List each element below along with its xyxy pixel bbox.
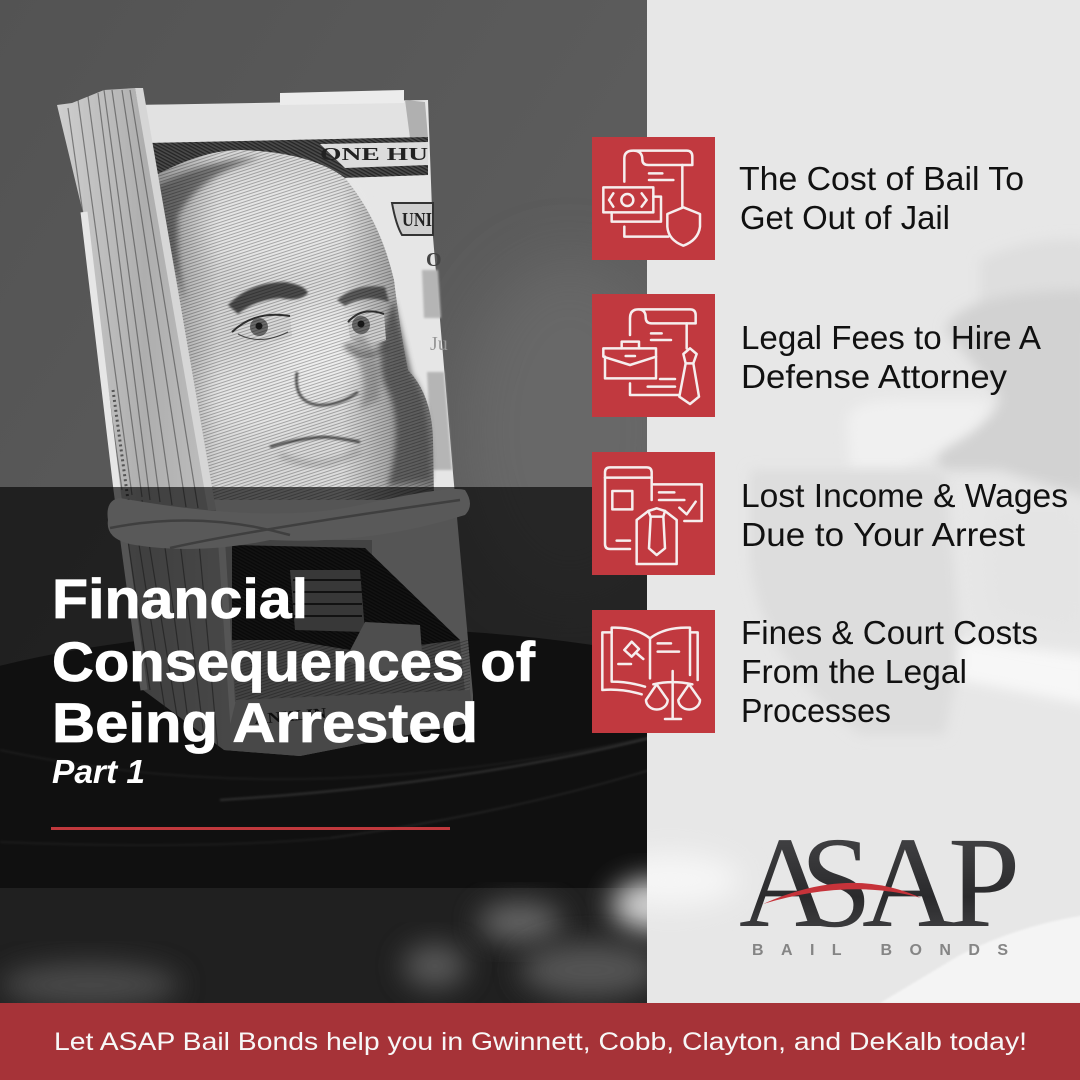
title: Consequences of bbox=[52, 630, 535, 693]
list item: fines bbox=[592, 610, 1038, 733]
logo: ASAP Bail Bonds: P bbox=[948, 811, 1020, 955]
red divider bbox=[51, 827, 450, 830]
left eye bbox=[232, 313, 292, 342]
united states plate: O bbox=[426, 249, 442, 271]
list item: cost of bail bbox=[592, 137, 1024, 260]
panel: photo background with money roll bbox=[0, 0, 647, 1003]
icon: bail money and shield document bbox=[592, 137, 715, 260]
portrait face bbox=[147, 150, 434, 500]
text: lost income bbox=[741, 477, 1068, 553]
logo: ASAP Bail Bonds: A bbox=[862, 811, 956, 955]
dark title overlay bbox=[0, 487, 647, 888]
subtitle: Part 1 bbox=[52, 753, 145, 790]
logo: ASAP Bail Bonds: S bbox=[800, 811, 872, 955]
money roll bbox=[57, 88, 473, 756]
right eye bbox=[345, 311, 388, 355]
text: cost of bail bbox=[739, 160, 1024, 236]
rubber band bbox=[108, 489, 470, 549]
engraving lines over face bbox=[147, 150, 434, 500]
united states plate bbox=[392, 203, 442, 271]
text: legal fees: Defense Attorney bbox=[741, 358, 1008, 395]
text: cost of bail: The Cost of Bail To bbox=[739, 160, 1024, 197]
icon: law book and scales bbox=[592, 610, 715, 733]
left brow bbox=[228, 282, 308, 314]
list item: legal fees bbox=[592, 294, 1041, 417]
text: legal fees bbox=[741, 319, 1041, 395]
title: Financial bbox=[52, 567, 308, 630]
bottom table reflection bbox=[0, 879, 692, 1007]
dark bill border bbox=[152, 137, 428, 178]
panel: red footer banner bbox=[0, 1003, 1080, 1080]
icon: employee file and shirt bbox=[592, 452, 715, 575]
icon: briefcase and tie document bbox=[592, 294, 715, 417]
text: fines: From the Legal bbox=[741, 653, 967, 690]
forehead highlight bbox=[195, 180, 340, 270]
logo: ASAP Bail Bonds: A bbox=[739, 811, 833, 955]
lower portrait: coat and collar: ANKLIN bbox=[254, 706, 327, 728]
text: fines: Processes bbox=[741, 692, 891, 729]
text: lost income: Due to Your Arrest bbox=[741, 516, 1025, 553]
one hundred lettering: ONE HU bbox=[320, 144, 428, 164]
panel: light background with blurred gavel bbox=[600, 0, 1080, 1003]
logo: ASAP Bail Bonds: BAIL BONDS bbox=[752, 942, 1008, 959]
text: fines: Fines & Court Costs bbox=[741, 614, 1038, 651]
footer text: Let ASAP Bail Bonds help you in Gwinnett, Cobb, Clayton, and DeKalb today! bbox=[54, 1028, 1027, 1056]
right brow bbox=[337, 286, 389, 306]
text: fines bbox=[741, 614, 1038, 729]
one hundred lettering bbox=[320, 142, 428, 168]
bill stack pages bbox=[57, 88, 232, 750]
list item: lost income bbox=[592, 452, 1068, 575]
title: Being Arrested bbox=[52, 691, 478, 754]
top white band bbox=[146, 104, 160, 105]
logo: ASAP Bail Bonds bbox=[739, 811, 1020, 959]
money roll: Ju bbox=[430, 333, 448, 355]
bill body bbox=[135, 100, 473, 756]
title bbox=[52, 567, 535, 754]
text: legal fees: Legal Fees to Hire A bbox=[741, 319, 1041, 356]
nose bbox=[296, 372, 358, 405]
lower portrait: coat and collar bbox=[224, 540, 473, 756]
text: cost of bail: Get Out of Jail bbox=[740, 199, 950, 236]
mouth bbox=[270, 437, 360, 447]
text: lost income: Lost Income & Wages bbox=[741, 477, 1068, 514]
disk base bbox=[0, 632, 647, 888]
hair and shaded cheek bbox=[160, 155, 258, 296]
united states plate: UNI bbox=[402, 209, 432, 231]
